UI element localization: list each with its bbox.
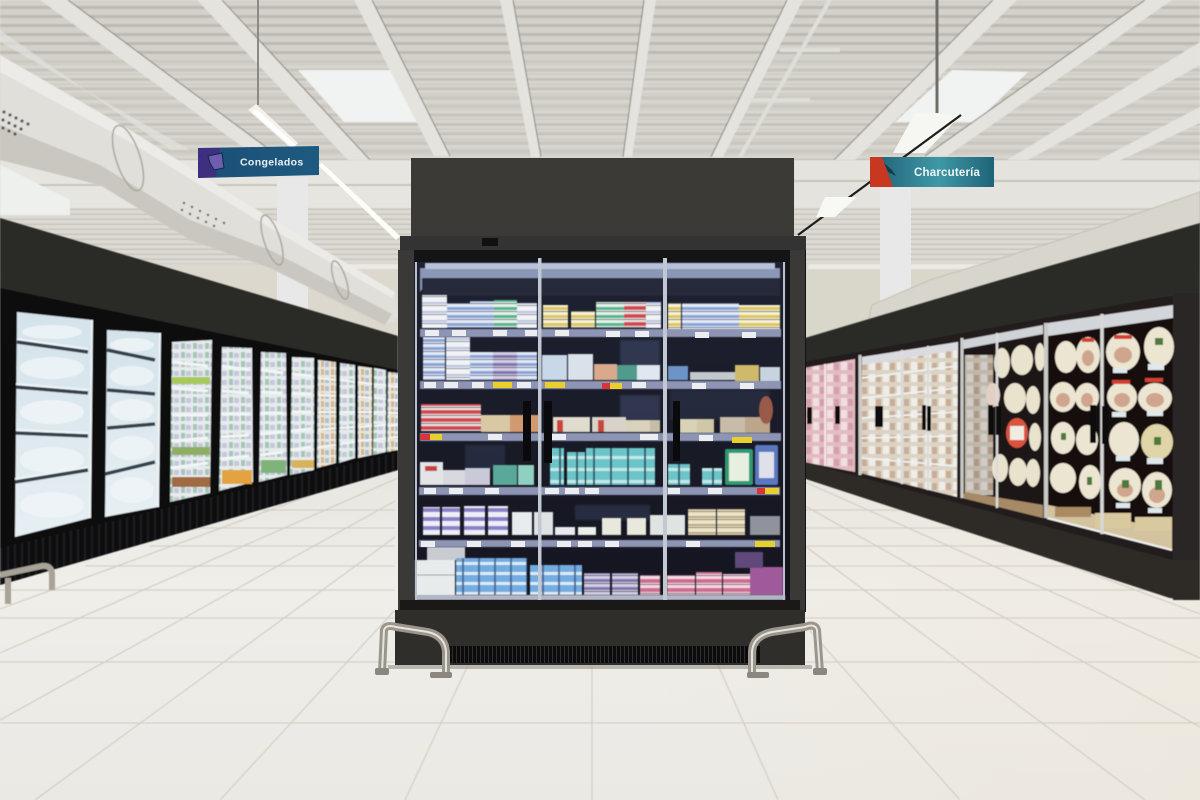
promo price tags (430, 382, 779, 547)
door bank: pizzas right (1046, 305, 1174, 550)
body (0, 288, 398, 585)
interior (414, 262, 786, 600)
top fascia (805, 223, 1200, 365)
sign: Charcutería (870, 157, 994, 187)
rear glow (465, 340, 770, 520)
central refrigerated unit (388, 158, 812, 669)
door bank: pink meats (804, 359, 855, 472)
chilled aisle right (803, 223, 1200, 600)
shelf 3 products (421, 396, 773, 433)
duct vents (1, 110, 225, 227)
ceiling (0, 0, 1200, 270)
sign: Congelados: Congelados (240, 156, 304, 168)
frame body (398, 250, 806, 612)
camera dome (482, 238, 498, 246)
freezer aisle left (0, 218, 398, 604)
end guard rail left (0, 566, 52, 604)
door bank: pizzas middle (962, 325, 1045, 518)
shelf 5 products (423, 506, 780, 535)
shelf 4 products (420, 445, 778, 485)
duct left (0, 55, 399, 325)
top panel (411, 158, 794, 238)
tray stacks (1055, 507, 1172, 531)
ceiling lamp right (798, 0, 961, 235)
floor (0, 470, 1200, 800)
doors with frozen bags (15, 312, 160, 537)
header frame (400, 236, 806, 251)
sale price tags (420, 383, 765, 494)
post (1173, 293, 1200, 600)
guard rail left (375, 626, 452, 678)
shelf 1 products (422, 295, 780, 330)
plinth lip (400, 600, 800, 610)
sign: Charcutería: Charcutería (914, 167, 981, 179)
door mullions and handles (415, 258, 785, 602)
guard rail right (747, 626, 827, 678)
price tags (421, 330, 756, 547)
door bank: sliced meats (860, 342, 958, 497)
kick plate (803, 462, 1200, 600)
skylight left (298, 70, 417, 122)
shelf 2 products (423, 337, 780, 382)
top fascia (0, 218, 398, 372)
kick plate (0, 452, 398, 585)
interior top light (420, 263, 780, 296)
pizza toppings (1056, 347, 1165, 503)
truss (740, 0, 840, 157)
duct right (868, 192, 1200, 322)
column right (880, 185, 911, 317)
skylight right (895, 70, 1028, 122)
floor tile grid (0, 478, 1200, 800)
shadow under unit (388, 665, 812, 669)
cross beams and upper wall (0, 160, 1200, 344)
ceiling lamp left (248, 0, 400, 240)
shelf price rails (415, 329, 785, 600)
pizzas (1050, 327, 1174, 508)
column left (277, 178, 308, 313)
base plinth (395, 610, 805, 665)
sign: Congelados (198, 146, 319, 178)
ceiling beams (0, 0, 1200, 166)
doors with packaged goods (170, 340, 398, 502)
vent grille (445, 646, 760, 663)
body (803, 295, 1200, 600)
shelf 6 products (415, 547, 783, 596)
